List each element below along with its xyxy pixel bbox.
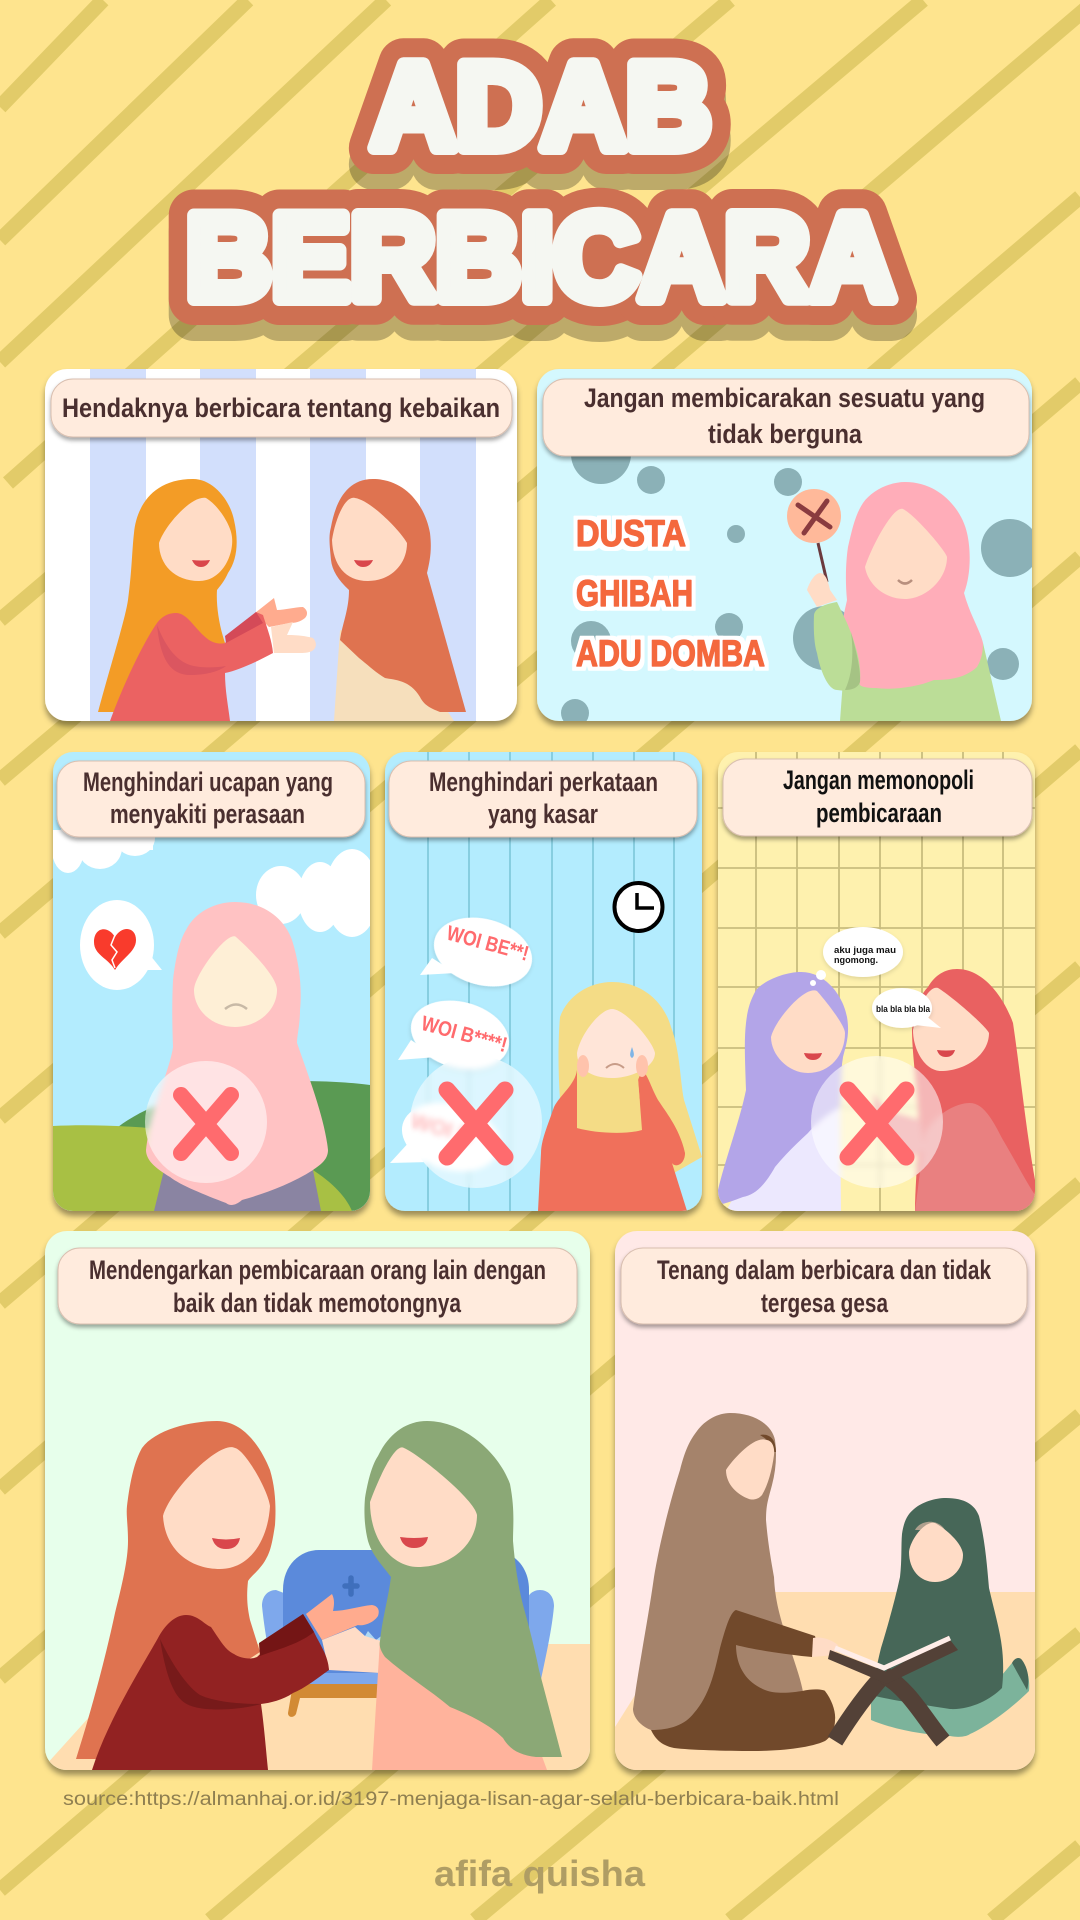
source line: source:https://almanhaj.or.id/3197-menjaga-lisan-agar-selalu-berbicara-baik.html bbox=[63, 1789, 839, 1810]
panel: berbicara tentang kebaikan bbox=[45, 369, 517, 721]
label: Jangan membicarakan sesuatu yang tidak berguna: Jangan membicarakan sesuatu yang bbox=[584, 383, 985, 413]
figure: woman in orange hijab bbox=[98, 479, 316, 721]
label: Hendaknya berbicara tentang kebaikan bbox=[51, 379, 512, 437]
label: Menghindari perkataan yang kasar bbox=[389, 761, 697, 837]
label: Jangan membicarakan sesuatu yang tidak berguna: tidak berguna bbox=[708, 419, 863, 449]
label: Menghindari ucapan yang menyakiti perasaan: menyakiti perasaan bbox=[110, 799, 305, 829]
title: ADAB BERBICARA: BERBICARA bbox=[186, 189, 895, 325]
panel: mendengarkan bbox=[45, 1231, 590, 1770]
label: Tenang dalam berbicara: tergesa gesa bbox=[761, 1288, 889, 1318]
title: ADAB BERBICARA: ADAB bbox=[371, 38, 711, 174]
speech bubble: bla bla bla bla: bla bla bla bla bbox=[876, 1004, 931, 1014]
figure: woman in purple hijab bbox=[718, 970, 848, 1211]
author name: afifa quisha bbox=[434, 1853, 646, 1894]
word list: DUSTA GHIBAH ADU DOMBA: GHIBAH bbox=[576, 573, 693, 614]
speech bubble: bla bla bla bla bbox=[872, 988, 941, 1028]
icon: open book on stand bbox=[828, 1636, 958, 1741]
speech bubble: broken heart bbox=[80, 900, 162, 990]
label: Jangan membicarakan sesuatu yang tidak berguna bbox=[543, 379, 1029, 456]
panel: perkataan kasar bbox=[385, 752, 702, 1211]
label: Menghindari perkataan yang kasar: Menghindari perkataan bbox=[429, 767, 658, 797]
word list: DUSTA GHIBAH ADU DOMBA bbox=[576, 513, 765, 674]
speech bubble: WOI BE**! bbox=[420, 917, 532, 990]
figure: woman in pale pink hijab bbox=[146, 902, 328, 1211]
figure: crying woman in yellow hijab bbox=[538, 982, 702, 1211]
figure: seated woman in brown hijab bbox=[633, 1413, 838, 1751]
label: Jangan memonopoli pembicaraan: Jangan memonopoli bbox=[783, 765, 974, 795]
panel: jangan memonopoli bbox=[718, 752, 1035, 1211]
speech bubble: aku juga mau ngomong: ngomong. bbox=[834, 955, 878, 965]
title: ADAB BERBICARA: BERBICARA bbox=[186, 205, 895, 341]
speech bubble: aku juga mau ngomong: aku juga mau bbox=[834, 945, 896, 955]
figure: seated girl in dark green hijab bbox=[871, 1498, 1029, 1737]
title: ADAB BERBICARA: ADAB bbox=[371, 38, 711, 174]
speech bubble: aku juga mau ngomong bbox=[823, 927, 903, 977]
label: Menghindari ucapan yang menyakiti perasaan bbox=[57, 761, 365, 837]
title: ADAB BERBICARA: ADAB bbox=[371, 54, 711, 190]
speech bubble: WOI BE**!: WOI BE**! bbox=[444, 922, 531, 966]
figure: woman in red hijab bbox=[873, 969, 1035, 1211]
label: Hendaknya berbicara tentang kebaikan: Hendaknya berbicara tentang kebaikan bbox=[62, 393, 500, 423]
panel: ucapan menyakiti bbox=[52, 752, 379, 1211]
speech bubble: blurred: WOI B bbox=[408, 1110, 475, 1148]
label: Mendengarkan pembicaraan orang lain: baik dan tidak memotongnya bbox=[173, 1288, 462, 1318]
speech bubble: blurred bbox=[390, 1101, 501, 1174]
label: Jangan memonopoli pembicaraan: pembicaraan bbox=[816, 798, 942, 828]
clouds bbox=[53, 829, 370, 937]
label: Menghindari perkataan yang kasar: yang kasar bbox=[488, 799, 598, 829]
figure: woman in green hijab bbox=[364, 1421, 562, 1770]
label: Tenang dalam berbicara bbox=[621, 1248, 1027, 1324]
hills bbox=[53, 1081, 370, 1211]
word list: DUSTA GHIBAH ADU DOMBA: DUSTA bbox=[576, 513, 686, 554]
title: ADAB BERBICARA bbox=[186, 38, 895, 341]
label: Mendengarkan pembicaraan orang lain: Mendengarkan pembicaraan orang lain dengan bbox=[89, 1255, 546, 1285]
speech bubble: WOI B****!: WOI B****! bbox=[419, 1012, 510, 1057]
figure: woman in terracotta hijab bbox=[330, 479, 466, 721]
sofa bbox=[262, 1550, 554, 1717]
icon: clock bbox=[614, 883, 662, 931]
figure: woman in terracotta hijab bbox=[76, 1421, 381, 1770]
icon: cross in frosted circle, panel 5 bbox=[811, 1056, 943, 1188]
icon: cross in frosted circle, panel 3 bbox=[145, 1061, 267, 1183]
label: Jangan memonopoli pembicaraan bbox=[723, 759, 1032, 836]
title: ADAB BERBICARA: BERBICARA bbox=[186, 189, 895, 325]
panel: tidak berguna bbox=[537, 369, 1039, 727]
label: Menghindari ucapan yang menyakiti perasaan: Menghindari ucapan yang bbox=[83, 767, 333, 797]
speech bubble: WOI B****! bbox=[398, 1000, 510, 1071]
label: Mendengarkan pembicaraan orang lain bbox=[58, 1248, 577, 1324]
figure: woman in pink hijab holding sign bbox=[787, 482, 1001, 721]
word list: DUSTA GHIBAH ADU DOMBA: ADU DOMBA bbox=[576, 633, 765, 674]
panel: tenang dalam berbicara bbox=[615, 1231, 1035, 1770]
label: Tenang dalam berbicara: Tenang dalam berbicara dan tidak bbox=[657, 1255, 992, 1285]
icon: cross in frosted circle, panel 4 bbox=[410, 1056, 542, 1188]
